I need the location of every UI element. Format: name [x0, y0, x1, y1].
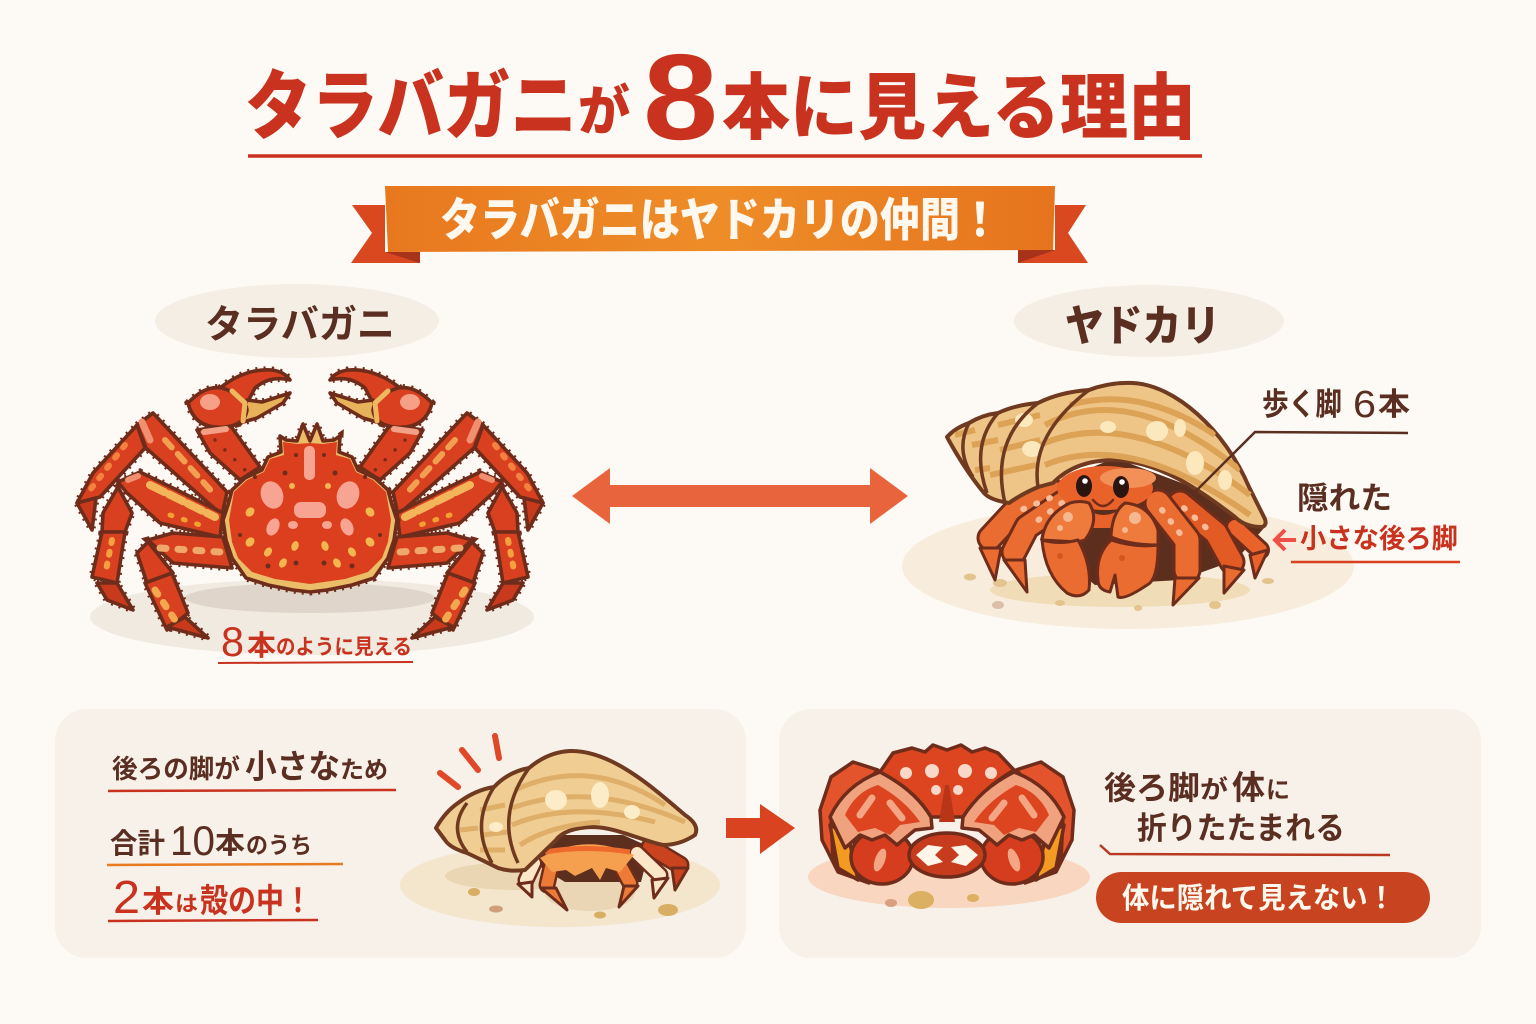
callout: 歩く脚 6本	[1195, 384, 1410, 492]
callout: 隠れた小さな後ろ脚: 小さな後ろ脚	[1300, 524, 1458, 554]
title: タラバガニ	[245, 65, 577, 150]
crab carapace	[223, 424, 397, 592]
hermit crab illustration	[902, 383, 1354, 629]
title	[245, 29, 1202, 165]
title: 本に見える理由	[722, 69, 1196, 149]
crab legs	[980, 493, 1268, 605]
text: 2本は殻の中！	[108, 871, 318, 923]
text: 合計10本のうち	[107, 817, 343, 865]
label pill: ヤドカリ	[1014, 285, 1284, 357]
text: 後ろ脚が体に	[1104, 769, 1290, 806]
pink ground	[808, 846, 1090, 909]
text: 後ろの脚が小さなため: ため	[340, 757, 388, 784]
small shell	[436, 751, 696, 871]
small hermit crab	[400, 736, 720, 927]
title: 8	[643, 29, 718, 165]
text: 後ろ脚が体に: 体	[1232, 769, 1265, 806]
folded mouth	[909, 833, 985, 877]
callout: 隠れた小さな後ろ脚	[1275, 481, 1460, 562]
pill: 体に隠れて見えない！: 体に隠れて見えない！	[1122, 882, 1395, 915]
text: 折りたたまれる	[1100, 811, 1390, 855]
pill: 体に隠れて見えない！	[1096, 872, 1430, 923]
text: 2本は殻の中！: 殻の中！	[200, 882, 312, 919]
cavity under shell	[1040, 458, 1264, 585]
text: 後ろ脚が体に: に	[1266, 777, 1290, 804]
front claws	[1042, 502, 1158, 598]
callout: 歩く脚 6本: 歩く脚	[1262, 387, 1342, 422]
caption: 8本のように見える: 8	[221, 618, 244, 665]
callout: 隠れた小さな後ろ脚: 隠れた	[1297, 481, 1392, 516]
panel: right explanation	[726, 709, 1481, 958]
text: 後ろの脚が小さなため	[108, 748, 396, 791]
folded limbs	[820, 762, 1074, 884]
sand patch	[902, 503, 1354, 629]
text: 後ろの脚が小さなため: 後ろの脚が	[112, 754, 240, 784]
caption: 8本のように見える: のように見える	[276, 636, 412, 659]
label pill: ヤドカリ: ヤドカリ	[1065, 303, 1220, 351]
label pill: タラバガニ	[155, 284, 439, 358]
crab ground shadow	[90, 579, 534, 655]
panel: left explanation	[55, 709, 746, 958]
ribbon banner	[351, 186, 1088, 263]
small legs	[518, 844, 688, 910]
crab face	[1057, 466, 1156, 528]
callout: 歩く脚 6本: 6	[1353, 384, 1376, 426]
shell	[947, 383, 1266, 527]
small body	[534, 835, 650, 882]
emphasis lines	[440, 736, 499, 787]
callout: 歩く脚 6本: 本	[1378, 387, 1410, 422]
text: 折りたたまれる: 折りたたまれる	[1137, 811, 1345, 846]
double-headed arrow	[572, 468, 908, 524]
text: 2本は殻の中！: 2	[113, 871, 140, 923]
text: 2本は殻の中！: 本	[142, 886, 174, 919]
label pill: タラバガニ: タラバガニ	[205, 304, 395, 347]
ribbon banner: タラバガニはヤドカリの仲間！	[440, 194, 1000, 246]
caption: 8本のように見える	[218, 618, 413, 665]
text: 後ろ脚が体に: 後ろ脚	[1104, 770, 1200, 806]
text: 2本は殻の中！: は	[175, 893, 198, 916]
folded carapace	[880, 745, 1014, 822]
folded king crab	[808, 745, 1090, 909]
crab legs and claws	[77, 370, 543, 638]
text: 合計10本のうち: 合計	[110, 828, 165, 859]
caption: 8本のように見える: 本	[247, 630, 276, 661]
title: が	[578, 81, 630, 142]
small sand patch	[400, 843, 720, 927]
text: 合計10本のうち: のうち	[246, 832, 312, 858]
king crab illustration	[77, 370, 543, 655]
text: 合計10本のうち: 10	[170, 817, 215, 864]
text: 後ろの脚が小さなため: 小さな	[245, 748, 340, 785]
text: 後ろ脚が体に: が	[1200, 775, 1228, 804]
text: 合計10本のうち: 本	[215, 827, 245, 860]
arrow between panels	[726, 804, 795, 854]
